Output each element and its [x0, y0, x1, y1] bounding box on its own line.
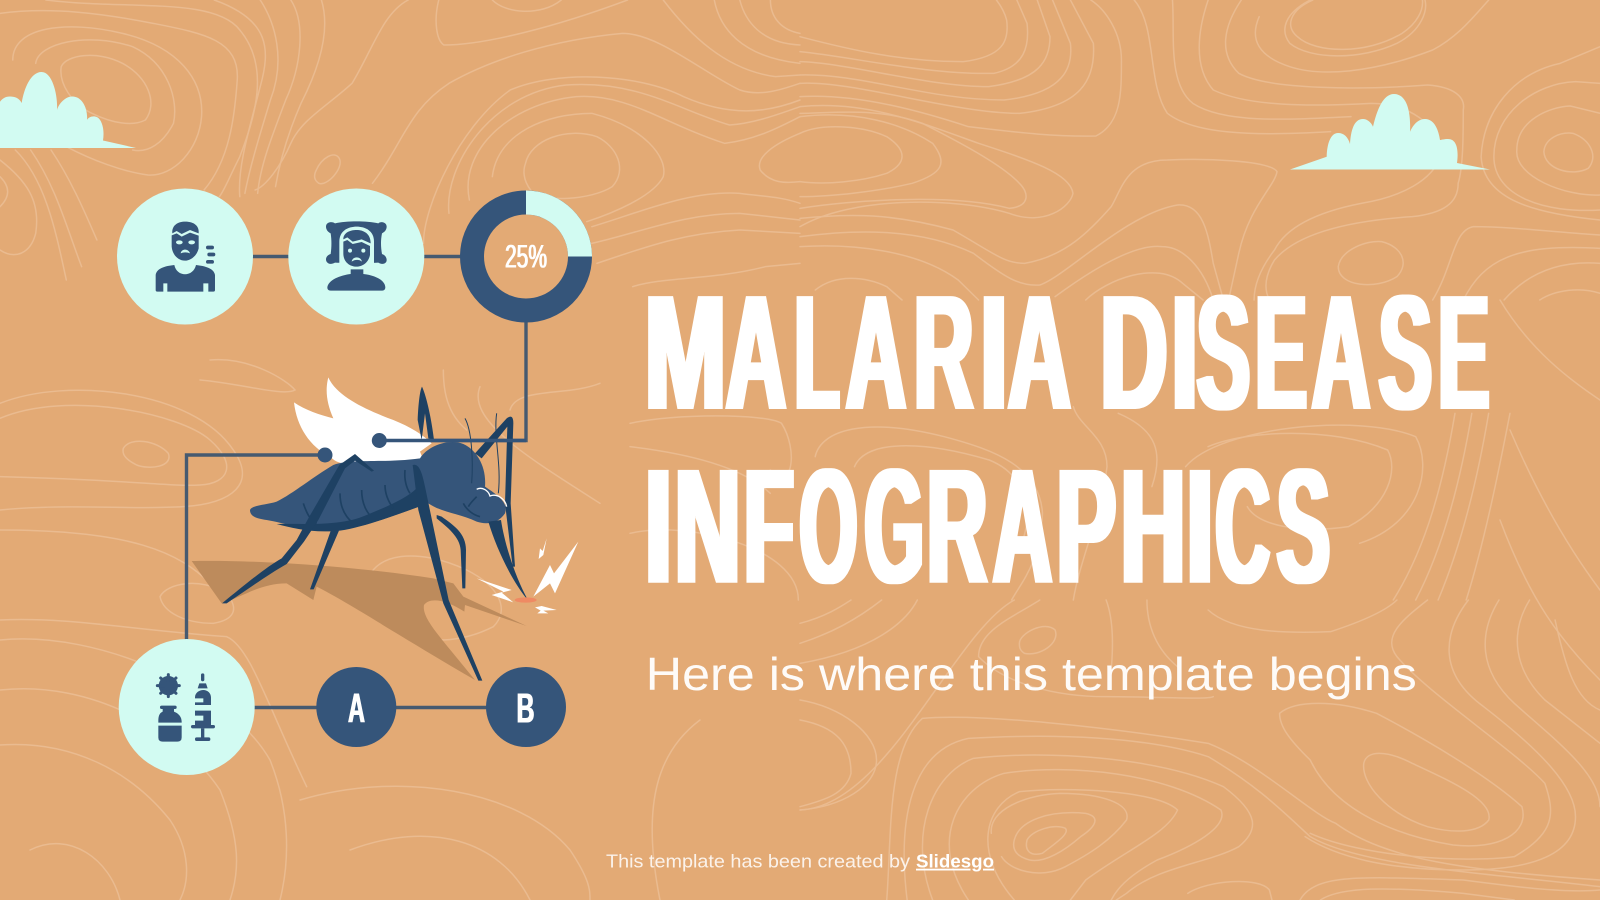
title: S — [1277, 435, 1330, 618]
title line 2: G — [865, 435, 924, 618]
mosquito mid leg — [437, 515, 466, 588]
title line 1: A — [1312, 261, 1370, 444]
bite spot — [515, 597, 537, 603]
badge A: A — [348, 685, 365, 732]
badge B — [486, 667, 566, 747]
donut chart: 25% — [472, 190, 592, 310]
title line 1: A — [726, 261, 786, 444]
title line 1: A — [846, 261, 906, 444]
mosquito long front leg — [413, 465, 482, 681]
title line 2: H — [1121, 435, 1185, 618]
icon: virus, vial and syringe — [157, 673, 215, 742]
title line 2: P — [1056, 435, 1116, 618]
title line 2: A — [993, 435, 1052, 618]
connector lines — [186, 256, 526, 708]
title line 1: I — [980, 261, 1008, 444]
mosquito shadow — [192, 561, 527, 680]
mosquito body — [250, 442, 506, 531]
icon: sick person on pillow — [326, 221, 387, 291]
donut value: 25% — [505, 239, 547, 275]
title line 1: A — [1008, 261, 1069, 444]
title line 1: E — [1255, 261, 1307, 444]
title line 2: N — [675, 435, 741, 618]
footer credit: This template has been created by — [606, 852, 910, 872]
mosquito proboscis — [488, 520, 528, 601]
cloud: top right — [1290, 94, 1490, 170]
mosquito front leg — [475, 417, 515, 567]
subtitle: Here is where this template begins — [646, 648, 1417, 700]
connector dots — [318, 433, 387, 462]
circle icon: vaccine — [119, 639, 255, 775]
footer brand link: Slidesgo — [916, 852, 994, 872]
title line 2: O — [800, 435, 857, 618]
title line 2: I — [644, 435, 672, 618]
badge A — [316, 667, 396, 747]
title line 2: F — [744, 435, 794, 618]
title line 1: I — [1171, 261, 1198, 444]
title line 2: R — [927, 435, 987, 618]
text: E — [1438, 261, 1489, 444]
circle icon: person coughing — [117, 188, 253, 324]
mosquito wings — [294, 377, 432, 464]
icon: coughing man — [156, 222, 215, 292]
title — [644, 261, 1489, 618]
title line 1: S — [1379, 261, 1432, 444]
mosquito raised appendage — [418, 387, 434, 440]
mosquito head outline — [477, 488, 507, 507]
badge B: B — [516, 685, 534, 732]
title line 1: L — [795, 261, 839, 444]
title line 1: R — [914, 261, 973, 444]
mosquito illustration — [192, 377, 578, 681]
title line 1: S — [1197, 261, 1250, 444]
circle icon: person in bed — [288, 188, 424, 324]
mosquito hairs — [465, 413, 499, 493]
title line 2: C — [1216, 435, 1270, 618]
title line 2: I — [1186, 435, 1214, 618]
mosquito body shading — [277, 488, 428, 531]
title line 1: D — [1100, 261, 1168, 444]
mosquito hind legs — [222, 454, 374, 603]
lightning sparks — [477, 538, 578, 613]
cloud: top left — [0, 72, 136, 148]
title line 1: M — [645, 261, 726, 444]
